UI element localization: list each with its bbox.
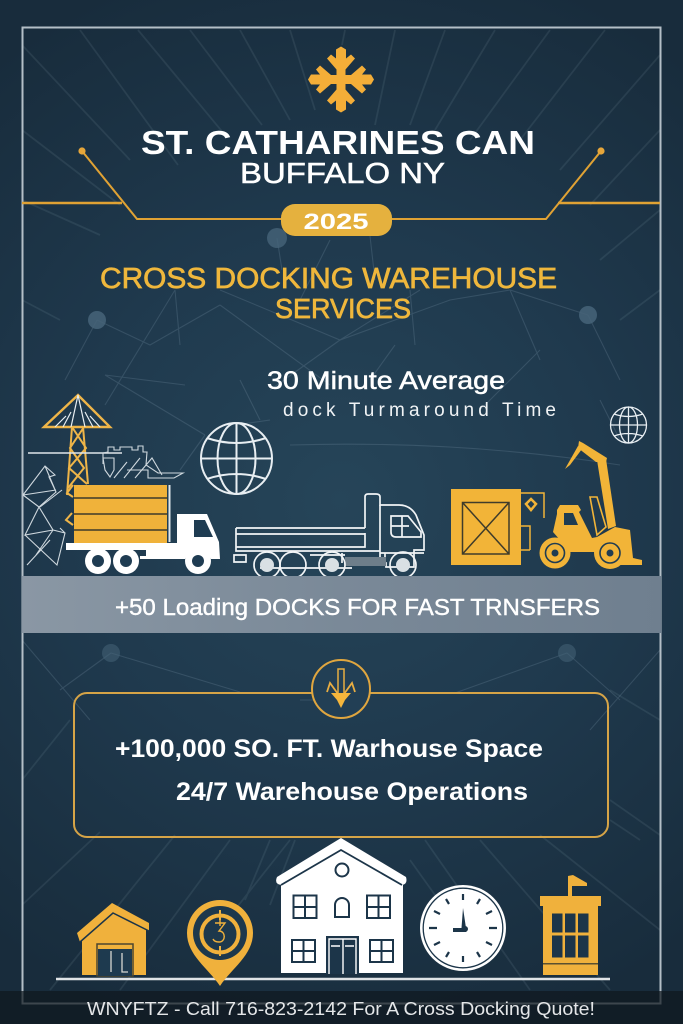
gold header connector lines [22, 147, 660, 219]
title: ST. CATHARINES CAN [141, 124, 535, 161]
ground line [56, 978, 610, 980]
heading: services: SERVICES [275, 293, 411, 324]
title [141, 124, 535, 190]
stat: dock turnaround [267, 367, 556, 421]
title: BUFFALO NY [240, 158, 445, 190]
icon: forklift [540, 441, 642, 569]
panel: warehouse facts [74, 693, 608, 837]
icon: small globe [610, 407, 646, 443]
band: loading docks: +50 Loading DOCKS FOR FAST TRNSFERS [115, 594, 600, 620]
icon: gold podium building [540, 875, 601, 975]
icon: power pylon [28, 395, 122, 525]
stat: dock turnaround: 30 Minute Average [267, 367, 505, 395]
heading: services [100, 263, 557, 324]
footer bar [0, 991, 683, 1024]
year badge: 2025 [304, 209, 368, 234]
text: warehouse space: +100,000 SO. FT. Warhouse Space [115, 735, 543, 763]
icon: location pin with dollar [187, 900, 253, 986]
flatbed truck [234, 494, 424, 578]
band: loading docks [22, 576, 661, 633]
heading: services: CROSS DOCKING WAREHOUSE [100, 263, 557, 295]
icon: small gold house [77, 903, 149, 976]
icon: gold crate [451, 489, 544, 565]
text: warehouse operations: 24/7 Warehouse Operations [176, 778, 528, 806]
icon: wireframe structures [23, 446, 183, 565]
icon: gold snowflake [308, 46, 374, 112]
icon: large white house [276, 838, 406, 974]
year badge [281, 204, 392, 236]
network of nodes [22, 228, 660, 730]
stat: dock turnaround: dock Turmaround Time [283, 400, 556, 421]
icon: circled down arrow [312, 660, 370, 718]
icon: clock [420, 886, 506, 970]
truck with gold cargo [66, 485, 220, 574]
footer bar: WNYFTZ - Call 716-823-2142 For A Cross Docking Quote! [87, 999, 595, 1019]
icon: large globe [201, 423, 272, 494]
